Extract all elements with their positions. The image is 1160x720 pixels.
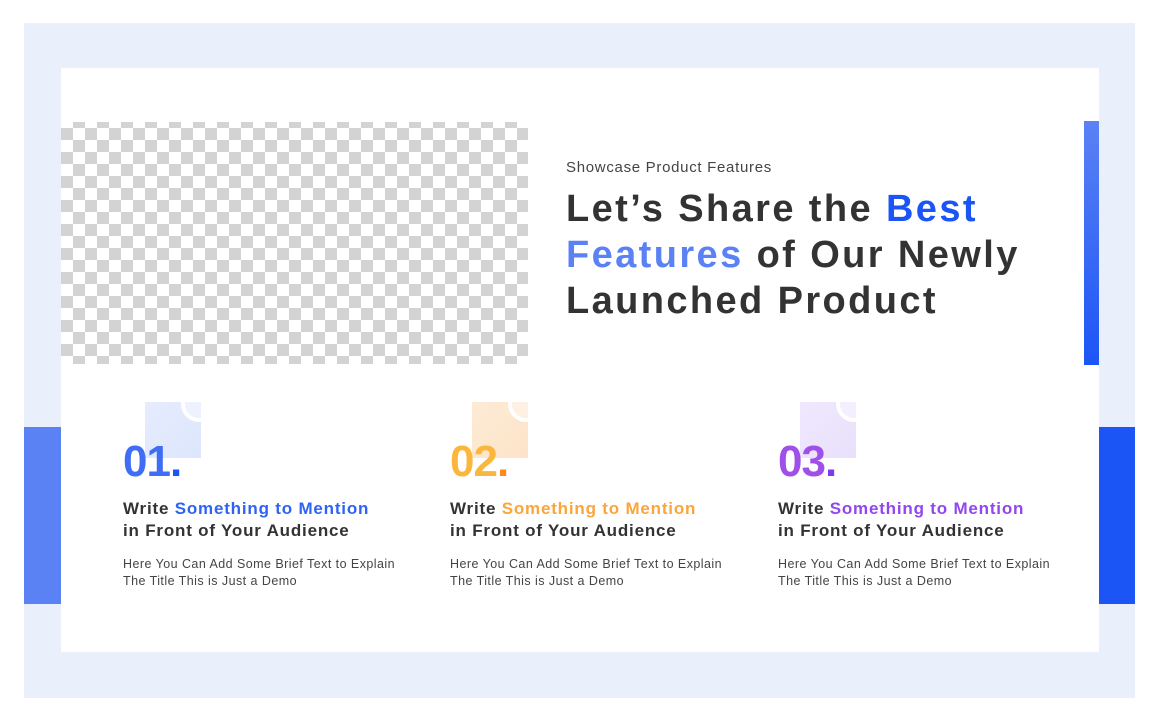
- text 3: [778, 557, 1050, 588]
- main heading: Features of Our Newly: [566, 234, 1020, 276]
- text 1: Here You Can Add Some Brief Text to Explain: [123, 557, 395, 571]
- image placeholder: [61, 122, 528, 364]
- icon square 1: [145, 402, 201, 458]
- main heading: Let’s Share the Best: [566, 188, 978, 230]
- icon square 2: [472, 402, 528, 458]
- heading 2: [450, 499, 696, 540]
- text 1: [123, 557, 395, 588]
- heading 1: [123, 499, 369, 540]
- feature 1: [123, 402, 395, 588]
- text 3: The Title This is Just a Demo: [778, 574, 952, 588]
- vertical gradient bar: [1084, 121, 1099, 365]
- heading 3: [778, 499, 1024, 540]
- number 02: 02.: [450, 437, 508, 486]
- text 2: [450, 557, 722, 588]
- text 2: Here You Can Add Some Brief Text to Explain: [450, 557, 722, 571]
- main heading: Launched Product: [566, 280, 938, 322]
- icon square 3: [800, 402, 856, 458]
- heading 1: in Front of Your Audience: [123, 521, 350, 540]
- heading 3: Write Something to Mention: [778, 499, 1024, 518]
- main heading: [566, 188, 1020, 322]
- feature 2: [450, 402, 722, 588]
- white card: [61, 68, 1099, 652]
- left accent bar: [24, 427, 61, 604]
- number 01: 01.: [123, 437, 181, 486]
- right accent bar: [1099, 427, 1135, 604]
- number 03: 03.: [778, 437, 836, 486]
- text 1: The Title This is Just a Demo: [123, 574, 297, 588]
- heading 2: Write Something to Mention: [450, 499, 696, 518]
- subtitle: Showcase Product Features: [566, 159, 772, 176]
- text 2: The Title This is Just a Demo: [450, 574, 624, 588]
- heading 2: in Front of Your Audience: [450, 521, 677, 540]
- heading 1: Write Something to Mention: [123, 499, 369, 518]
- heading 3: in Front of Your Audience: [778, 521, 1005, 540]
- feature 3: [778, 402, 1050, 588]
- text 3: Here You Can Add Some Brief Text to Explain: [778, 557, 1050, 571]
